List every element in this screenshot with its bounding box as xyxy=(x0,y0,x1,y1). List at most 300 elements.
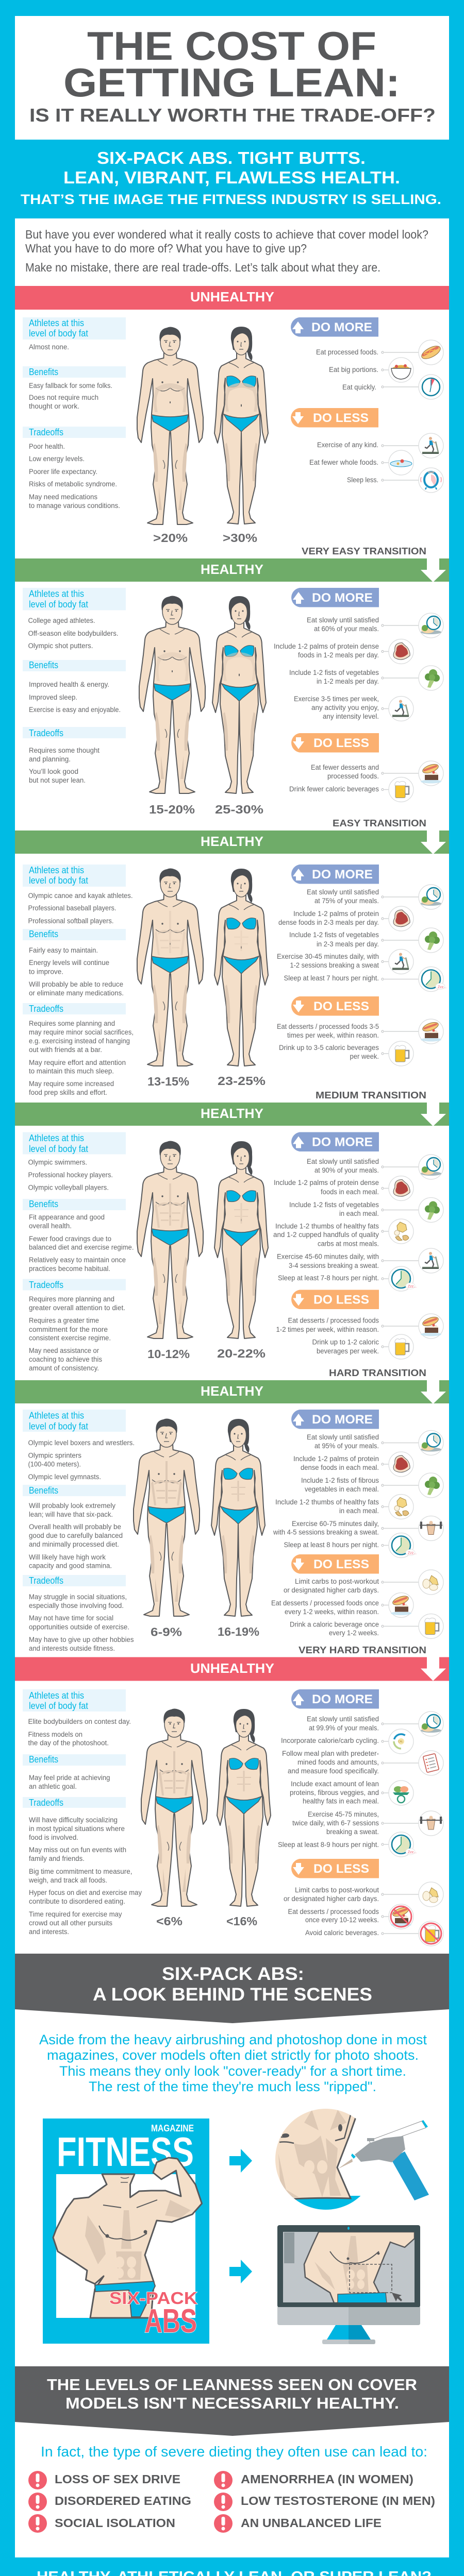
item: eat slowly xyxy=(307,613,443,638)
item: meal plan: and measure food specifically. xyxy=(288,1767,379,1775)
banner: six-pack abs: SIX-PACK ABS: xyxy=(162,1964,304,1984)
item: eat slowly: at 60% of your meals. xyxy=(314,625,379,633)
left column text: Fairly easy to maintain. xyxy=(29,946,98,954)
left column text: the day of the photoshoot. xyxy=(28,1739,109,1747)
intro text xyxy=(25,228,428,274)
item: carbs xyxy=(284,1882,443,1907)
item: meal plan: Follow meal plan with predeter- xyxy=(282,1750,379,1757)
item: exercise: Exercise 3-5 times per week, xyxy=(294,695,379,703)
item: eat slowly: Eat slowly until satisfied xyxy=(307,616,379,624)
item: desserts xyxy=(276,1314,443,1338)
figure: male xyxy=(134,1419,200,1616)
banner: healthy: HEALTHY xyxy=(201,1383,263,1399)
item: vegetables: Include 1-2 fists of vegetables xyxy=(289,931,379,939)
item: fats: in each meal. xyxy=(339,1507,379,1515)
section 1: unhealthy xyxy=(15,286,449,556)
left column text xyxy=(23,1410,135,1652)
item: eat slowly xyxy=(307,1155,443,1179)
transition label: VERY HARD TRANSITION xyxy=(299,1645,426,1655)
risk: disordered eating: DISORDERED EATING xyxy=(55,2494,191,2507)
left column text: Requires some planning and xyxy=(29,1020,115,1027)
left column text: but not super lean. xyxy=(29,776,86,784)
item: fats and carbs: carbs at most meals. xyxy=(318,1240,379,1248)
left column text: capacity and good stamina. xyxy=(29,1562,112,1569)
left column text: weigh, and track all foods. xyxy=(28,1876,107,1884)
figure: male xyxy=(137,869,203,1066)
risk: loss of sex drive xyxy=(28,2471,180,2489)
item: exercise xyxy=(292,1810,443,1836)
left column text: Off-season elite bodybuilders. xyxy=(28,630,119,637)
left column text: out with friends at a bar. xyxy=(29,1046,102,1054)
risk: social isolation: SOCIAL ISOLATION xyxy=(55,2516,175,2530)
left column text: e.g. exercising instead of hanging xyxy=(29,1037,130,1045)
left column text: Benefits xyxy=(29,1199,58,1209)
item: desserts: Eat desserts / processed foods once xyxy=(271,1599,379,1607)
illustration: airbrush xyxy=(273,2107,429,2213)
left column text xyxy=(23,865,134,1096)
do less badge: DO LESS xyxy=(313,999,369,1013)
do more badge xyxy=(291,317,378,337)
left column text: Will have difficulty socializing xyxy=(29,1816,118,1824)
left column text: to maintain this much sleep. xyxy=(29,1067,114,1075)
do more badge: DO MORE xyxy=(312,591,373,605)
item: big portions: Eat big portions. xyxy=(329,366,378,374)
item: sleep: Zzz... xyxy=(408,1552,417,1555)
do less badge xyxy=(291,996,379,1016)
left column text: Tradeoffs xyxy=(29,1798,63,1808)
left column text: an athletic goal. xyxy=(29,1783,77,1790)
left column text: greater overall attention to diet. xyxy=(29,1304,125,1312)
left column text: consistent exercise regime. xyxy=(29,1334,111,1342)
left column text: and interests outside fitness. xyxy=(29,1645,115,1652)
left column text: Tradeoffs xyxy=(29,1004,63,1014)
item: sleep: Sleep at least 7 hours per night. xyxy=(284,974,379,982)
left column text: good due to carefully balanced xyxy=(29,1532,123,1539)
item: eat slowly: Eat slowly until satisfied xyxy=(307,1158,379,1165)
banner: healthy: HEALTHY xyxy=(201,1106,263,1121)
left column text: especially those involving food. xyxy=(29,1602,124,1609)
item: desserts: processed foods. xyxy=(327,772,379,780)
item: desserts: Eat desserts / processed foods 3-5 xyxy=(277,1023,379,1030)
item: protein: Include 1-2 palms of protein dense xyxy=(274,1179,379,1187)
left column text: Almost none. xyxy=(29,343,69,351)
body fat labels: 16-19% xyxy=(218,1625,259,1638)
left column text: Benefits xyxy=(29,367,58,377)
item: desserts xyxy=(311,761,443,786)
banner: levels of leanness: THE LEVELS OF LEANNESS SEEN ON COVER xyxy=(47,2376,417,2394)
item: desserts: every 1-2 weeks, within reason. xyxy=(285,1608,379,1616)
figure: female xyxy=(214,869,268,1066)
left column text: to improve. xyxy=(29,968,63,976)
body fat labels xyxy=(153,531,257,545)
left column text: Exercise is easy and enjoyable. xyxy=(29,706,121,714)
do more badge xyxy=(291,1410,379,1429)
item: cycling: CAL xyxy=(398,1740,403,1743)
banner: healthy: HEALTHY xyxy=(201,834,263,849)
item: exercise: Exercise 45-75 minutes, xyxy=(308,1810,379,1818)
item: beverages xyxy=(290,1614,443,1638)
left column text: Poorer life expectancy. xyxy=(29,468,97,476)
left column text: Benefits xyxy=(29,929,58,939)
risk: low testosterone: LOW TESTOSTERONE (IN MEN) xyxy=(241,2494,435,2507)
left column text: Athletes at this xyxy=(29,1133,84,1143)
item: carbs: Limit carbs to post-workout xyxy=(295,1578,379,1585)
figure: female xyxy=(217,1709,271,1906)
title: THE COST OF xyxy=(87,23,376,69)
transition label: HARD TRANSITION xyxy=(329,1368,426,1378)
risk: unbalanced life: AN UNBALANCED LIFE xyxy=(241,2516,382,2530)
item: protein xyxy=(293,1452,413,1477)
risk: disordered eating xyxy=(28,2493,191,2511)
do less badge: DO LESS xyxy=(313,411,369,425)
body fat labels: 23-25% xyxy=(218,1074,266,1088)
left column text: Athletes at this xyxy=(29,318,84,328)
item: beverages: Drink fewer caloric beverages xyxy=(289,785,379,793)
item: sleep: Sleep at least 8 hours per night. xyxy=(284,1541,379,1549)
left column text: Requires more planning and xyxy=(29,1295,114,1303)
left column text: Will likely have high work xyxy=(29,1553,106,1561)
item: whole foods xyxy=(309,450,413,475)
item: carbs xyxy=(284,1570,443,1595)
figure: male xyxy=(137,1141,203,1338)
item: eat slowly xyxy=(307,1711,443,1736)
intro text: What you have to do more of? What you have to give up? xyxy=(25,242,307,255)
banner: six-pack abs xyxy=(15,1954,449,2023)
left column text: balanced diet and exercise regime. xyxy=(29,1244,134,1251)
item: beverages: Drink up to 3-5 caloric beverages xyxy=(279,1044,379,1052)
left column text: Benefits xyxy=(29,1485,58,1496)
transition label: VERY EASY TRANSITION xyxy=(302,546,426,556)
bodybuilder xyxy=(53,2158,202,2318)
figure: male xyxy=(141,1708,207,1906)
item: vegetables: vegetables in each meal. xyxy=(305,1485,379,1493)
left column text: level of body fat xyxy=(29,599,88,609)
section 6: unhealthy extreme xyxy=(15,1657,449,1946)
left column text: thought or work. xyxy=(29,402,79,410)
item: fats and carbs: Include 1-2 thumbs of healthy fats xyxy=(275,1222,379,1230)
blue paragraph: The rest of the time they're much less "ripped". xyxy=(89,2079,376,2094)
left column text: overall health. xyxy=(29,1222,72,1230)
item: processed foods: Eat processed foods. xyxy=(316,348,378,356)
left column text: May need assistance or xyxy=(29,1347,99,1354)
body fat labels: 15-20% xyxy=(149,803,195,816)
left column text: May struggle in social situations, xyxy=(29,1593,127,1601)
left column text: to manage various conditions. xyxy=(29,502,120,510)
item: desserts xyxy=(288,1904,413,1929)
illustration: monitor xyxy=(277,2225,420,2344)
item: processed foods xyxy=(316,340,443,365)
item: sleep xyxy=(278,1832,417,1857)
left column text: Tradeoffs xyxy=(29,1280,63,1290)
do more badge: DO MORE xyxy=(312,1136,373,1149)
left column text: Fitness models on xyxy=(28,1731,82,1738)
item: exercise: with 4-5 sessions breaking a sweat. xyxy=(273,1528,379,1536)
item: exact amounts: proteins, fibrous veggies, and xyxy=(290,1789,379,1797)
left column text: Does not require much xyxy=(29,394,98,401)
left column text: Elite bodybuilders on contest day. xyxy=(28,1718,131,1725)
item: desserts xyxy=(277,1019,443,1044)
item: protein xyxy=(274,639,413,664)
body fat labels: >30% xyxy=(223,531,257,545)
left column text: Tradeoffs xyxy=(29,728,63,738)
item: vegetables: Include 1-2 fists of fibrous xyxy=(301,1477,379,1484)
item: beverages: Drink a caloric beverage once xyxy=(290,1621,379,1628)
risk: loss of sex drive: LOSS OF SEX DRIVE xyxy=(55,2472,180,2486)
do less badge: DO LESS xyxy=(313,736,369,750)
risk: unbalanced life xyxy=(214,2514,382,2533)
item: carbs: or designated higher carb days. xyxy=(284,1895,379,1903)
do more badge xyxy=(291,865,379,884)
item: fats and carbs: and 1-2 cupped handfuls of quality xyxy=(273,1231,379,1239)
do less badge xyxy=(291,1290,379,1309)
item: exercise: Exercise 30-45 minutes daily, with xyxy=(277,953,379,960)
left column text: Olympic level boxers and wrestlers. xyxy=(28,1439,135,1447)
blue paragraph: This means they only look "cover-ready" for a short time. xyxy=(59,2063,406,2079)
item: beverages: Avoid caloric beverages. xyxy=(305,1929,379,1937)
intro headline xyxy=(21,148,441,207)
item: sleep less xyxy=(347,468,443,493)
left column text: Fit appearance and good xyxy=(29,1213,105,1221)
item: protein: foods in 1-2 meals per day. xyxy=(298,651,379,659)
item: desserts: 1-2 times per week, within reason. xyxy=(276,1326,379,1333)
risk: amenorrhea xyxy=(214,2471,413,2489)
left column text: Energy levels will continue xyxy=(29,959,109,967)
left column text: Olympic level gymnasts. xyxy=(28,1473,101,1481)
left column text: in most typical situations where xyxy=(29,1825,125,1833)
item: vegetables: Include 1-2 fists of vegetables xyxy=(289,1201,379,1209)
do less badge xyxy=(291,1859,379,1878)
item: sleep: Zzz... xyxy=(408,1851,417,1854)
left column text xyxy=(23,1689,142,1936)
left column text: Low energy levels. xyxy=(29,455,85,463)
item: eat slowly: Eat slowly until satisfied xyxy=(307,1433,379,1441)
item: eat slowly: at 95% of your meals. xyxy=(314,1442,379,1450)
item: exercise: Exercise 45-60 minutes daily, with xyxy=(277,1253,379,1260)
banner: healthy xyxy=(15,1380,449,1404)
do less badge: DO LESS xyxy=(313,1293,369,1307)
item: desserts: Eat desserts / processed foods xyxy=(288,1317,379,1324)
item: sleep: Zzz... xyxy=(408,1285,417,1289)
item: vegetables xyxy=(289,1197,443,1222)
left column text: Requires some thought xyxy=(29,747,100,754)
intro text: But have you ever wondered what it really costs to achieve that cover model look? xyxy=(25,228,428,241)
do more badge: DO MORE xyxy=(312,1413,373,1427)
left column text: May miss out on fun events with xyxy=(29,1846,126,1854)
do more badge xyxy=(291,1132,379,1151)
item: exercise: any intensity level. xyxy=(323,713,379,720)
item: protein: foods in each meal. xyxy=(321,1188,379,1196)
item: exercise: 3-4 sessions breaking a sweat. xyxy=(289,1262,379,1269)
left column text: Poor health. xyxy=(29,443,65,450)
figure: male xyxy=(137,327,203,524)
item: beverages: per week. xyxy=(350,1053,379,1060)
risk: social isolation xyxy=(28,2514,175,2533)
do less badge xyxy=(291,1554,379,1573)
do less badge: DO LESS xyxy=(313,1557,369,1571)
left column text xyxy=(23,317,126,510)
item: protein xyxy=(278,906,413,931)
banner: unhealthy: UNHEALTHY xyxy=(190,1660,274,1676)
item: beverages: every 1-2 weeks. xyxy=(329,1629,379,1637)
left column text: Olympic sprinters xyxy=(28,1452,81,1459)
left column text: Olympic canoe and kayak athletes. xyxy=(28,892,133,900)
item: exercise xyxy=(277,1248,443,1273)
item: exercise xyxy=(273,1516,443,1540)
cover text abs: ABS xyxy=(144,2302,197,2340)
item: sleep less: Sleep less. xyxy=(347,476,378,484)
item: vegetables: Include 1-2 fists of vegetables xyxy=(289,669,379,676)
item: exercise xyxy=(277,949,413,974)
left column text: Tradeoffs xyxy=(29,427,63,437)
item: cycling xyxy=(281,1729,413,1754)
item: vegetables: in 2-3 meals per day. xyxy=(317,940,379,948)
banner: unhealthy xyxy=(15,1657,449,1681)
left column text: family and friends. xyxy=(29,1855,85,1862)
left column text: Improved health & energy. xyxy=(29,681,109,688)
do more badge: DO MORE xyxy=(311,320,372,334)
item: meal plan: mined foods and amounts, xyxy=(297,1758,379,1766)
left column text: Risks of metabolic syndrome. xyxy=(29,480,117,488)
left column text: (100-400 meters). xyxy=(28,1460,81,1468)
item: eat slowly xyxy=(307,885,443,909)
item: exercise: any activity you enjoy, xyxy=(311,704,379,711)
blue paragraph: Aside from the heavy airbrushing and photoshop done in most xyxy=(39,2032,427,2047)
subtitle: IS IT REALLY WORTH THE TRADE-OFF? xyxy=(29,105,436,126)
item: sleep: Sleep at least 8-9 hours per night. xyxy=(278,1841,379,1849)
left column text: Will probably look extremely xyxy=(29,1502,115,1510)
blue paragraph xyxy=(39,2032,427,2094)
left column text: may require minor social sacrifices, xyxy=(29,1028,134,1036)
banner: unhealthy: UNHEALTHY xyxy=(190,289,274,304)
left column text: Benefits xyxy=(29,660,58,670)
item: protein: Include 1-2 palms of protein xyxy=(293,1455,379,1463)
item: sleep xyxy=(284,1533,417,1558)
left column text: Professional baseball players. xyxy=(28,904,117,912)
item: exercise: twice daily, with 6-7 sessions xyxy=(292,1819,379,1827)
left column text: Will probably be able to reduce xyxy=(29,980,123,988)
masthead: MAGAZINE xyxy=(151,2123,194,2133)
item: meal plan xyxy=(282,1750,443,1775)
left column text: level of body fat xyxy=(29,328,88,338)
figure: female xyxy=(211,1419,265,1616)
item: beverages xyxy=(305,1921,443,1946)
item: carbs: Limit carbs to post-workout xyxy=(295,1886,379,1894)
left column text: Hyper focus on diet and exercise may xyxy=(29,1889,142,1896)
left column text: and interests. xyxy=(29,1928,69,1936)
blue paragraph: magazines, cover models often diet strictly for photo shoots. xyxy=(47,2047,419,2063)
intro text: Make no mistake, there are real trade-offs. Let’s talk about what they are. xyxy=(25,261,380,274)
body fat labels: 20-22% xyxy=(217,1347,266,1360)
item: sleep xyxy=(284,967,446,991)
body fat labels: <6% xyxy=(156,1914,183,1928)
left column text: Big time commitment to measure, xyxy=(29,1868,132,1875)
figure: male xyxy=(139,596,205,793)
left column text: Improved sleep. xyxy=(29,693,77,701)
left column text: Tradeoffs xyxy=(29,1575,63,1586)
figure: female xyxy=(214,1141,268,1338)
left column text: Benefits xyxy=(29,1754,58,1765)
item: exercise: 1-2 sessions breaking a sweat xyxy=(290,961,379,969)
left column text xyxy=(23,588,126,784)
body fat labels xyxy=(149,803,263,816)
banner: healthy: HEALTHY xyxy=(201,562,263,577)
do more badge xyxy=(291,1689,379,1708)
banner: healthy xyxy=(15,558,449,582)
banner: levels of leanness xyxy=(15,2366,449,2436)
body fat labels: >20% xyxy=(153,531,188,545)
item: vegetables xyxy=(301,1473,443,1498)
banner: levels of leanness: MODELS ISN'T NECESSARILY HEALTHY. xyxy=(65,2394,399,2412)
body fat labels: 10-12% xyxy=(147,1347,190,1361)
item: eat slowly: at 90% of your meals. xyxy=(314,1166,379,1174)
item: sleep: Sleep at least 7-8 hours per night. xyxy=(278,1274,379,1282)
left column text: May need medications xyxy=(29,493,97,501)
item: beverages: beverages per week. xyxy=(317,1347,379,1355)
item: desserts: Eat desserts / processed foods xyxy=(288,1908,379,1916)
item: beverages: Drink up to 1-2 caloric xyxy=(312,1338,379,1346)
left column text: May not have time for social xyxy=(29,1614,113,1622)
left column text: Olympic volleyball players. xyxy=(28,1184,109,1191)
banner: healthy xyxy=(15,1103,449,1126)
left column text: coaching to achieve this xyxy=(29,1355,102,1363)
torso on screen xyxy=(304,2232,415,2303)
left column text: practices become habitual. xyxy=(29,1265,110,1273)
left column text: May require some increased xyxy=(29,1080,114,1088)
transition label: MEDIUM TRANSITION xyxy=(316,1090,426,1100)
intro headline: LEAN, VIBRANT, FLAWLESS HEALTH. xyxy=(63,168,400,187)
body fat labels xyxy=(151,1625,259,1638)
left column text xyxy=(23,1132,134,1372)
item: eat slowly: Eat slowly until satisfied xyxy=(307,1715,379,1723)
intro headline: SIX-PACK ABS. TIGHT BUTTS. xyxy=(97,148,366,167)
item: protein xyxy=(274,1176,413,1200)
left column text: Overall health will probably be xyxy=(29,1523,121,1531)
item: beverages xyxy=(279,1041,413,1066)
item: desserts: times per week, within reason. xyxy=(287,1031,379,1039)
item: eat quickly: Eat quickly. xyxy=(342,383,376,391)
left column text: level of body fat xyxy=(29,1144,88,1154)
item: cycling: Incorporate calorie/carb cycling. xyxy=(281,1737,379,1744)
section 4: healthy 10-12 xyxy=(15,1103,449,1378)
left column text: contribute to disordered eating. xyxy=(29,1897,125,1905)
risk: low testosterone xyxy=(214,2493,435,2511)
airbrush tool xyxy=(351,2120,429,2200)
item: whole foods: Eat fewer whole foods. xyxy=(309,459,378,466)
left column text: level of body fat xyxy=(29,1421,88,1431)
masthead fitness: FITNESS xyxy=(57,2129,194,2175)
item: eat slowly: at 75% of your meals. xyxy=(314,897,379,905)
intro headline: THAT’S THE IMAGE THE FITNESS INDUSTRY IS SELLING. xyxy=(21,192,441,207)
item: exercise xyxy=(294,695,413,721)
item: exercise: Exercise of any kind. xyxy=(317,441,378,449)
heading: severe dieting: In fact, the type of severe dieting they often use can lead to: xyxy=(41,2444,427,2460)
left column text: lean; will have that six-pack. xyxy=(29,1511,113,1518)
left column text: Athletes at this xyxy=(29,865,84,875)
left column text: May require effort and attention xyxy=(29,1059,126,1066)
risk: amenorrhea: AMENORRHEA (IN WOMEN) xyxy=(241,2472,413,2486)
left column text: Easy fallback for some folks. xyxy=(29,382,112,389)
item: protein: dense foods in 2-3 meals per day. xyxy=(278,919,379,926)
banner: six-pack abs: A LOOK BEHIND THE SCENES xyxy=(93,1985,372,2005)
left column text: and planning. xyxy=(29,755,71,763)
body fat labels: 25-30% xyxy=(215,803,263,816)
body fat labels xyxy=(156,1914,257,1928)
left column text: You’ll look good xyxy=(29,768,78,775)
banner: healthy xyxy=(15,831,449,854)
do less badge xyxy=(291,408,378,428)
left column text: Fewer food cravings due to xyxy=(29,1235,111,1243)
section 5: healthy 6-9 xyxy=(15,1380,449,1655)
